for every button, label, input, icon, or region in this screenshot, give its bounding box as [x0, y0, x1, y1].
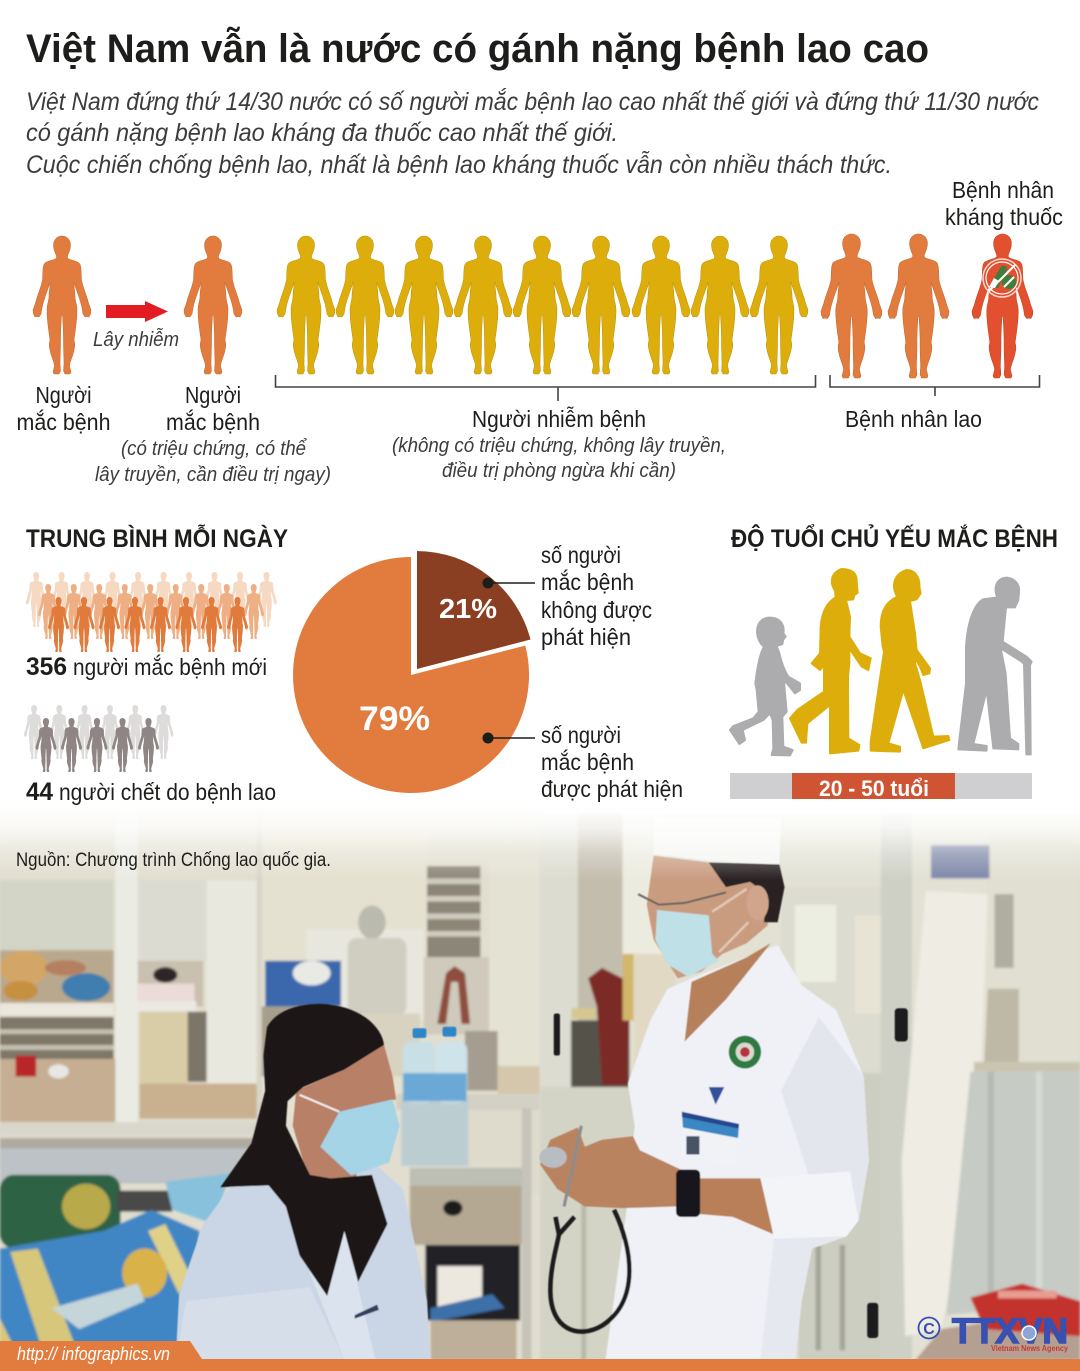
- intro text: có gánh nặng bệnh lao kháng đa thuốc cao nhất thế giới.: [26, 119, 618, 147]
- label: undetected: mắc bệnh: [541, 569, 634, 595]
- intro text: [26, 87, 1039, 179]
- figure: sick person: [33, 236, 91, 374]
- logo: TTXVN: TTXVN: [952, 1312, 1068, 1351]
- icon group: deaths: [24, 705, 174, 772]
- photo right part: doctor and room: [539, 810, 1080, 1360]
- note: infected: (không có triệu chứng, không lây truyền,: [392, 435, 726, 457]
- background photo: doctor and patient: [0, 808, 1080, 1360]
- leader: undetected: [482, 578, 535, 588]
- woman face and neck: [292, 1044, 396, 1180]
- arrow: infection: [106, 301, 168, 322]
- silhouette: elderly: [958, 578, 1032, 754]
- label: second sick person: Người: [185, 382, 241, 408]
- label: infection: Lây nhiễm: [93, 328, 179, 351]
- doctor forearm and hands: [692, 1178, 774, 1234]
- source: Nguồn: Chương trình Chống lao quốc gia.: [16, 850, 331, 871]
- stat: deaths: 44: [26, 778, 53, 806]
- label: first sick person: Người: [36, 382, 92, 408]
- label: drug-resistant patient: kháng thuốc: [945, 204, 1063, 230]
- photo fade to white: [0, 805, 1080, 880]
- label: detected: được phát hiện: [541, 776, 683, 802]
- stat: new cases: 356: [26, 653, 67, 681]
- slice: detected 79%: [293, 557, 529, 793]
- doctor cap: [654, 817, 781, 864]
- doctor emblem: [729, 1036, 761, 1069]
- figure: drug-resistant patient: [972, 234, 1033, 378]
- panel: daily average: [24, 523, 288, 806]
- age bar: 20 - 50 tuổi: [819, 776, 929, 801]
- label: undetected: số người: [541, 542, 621, 568]
- title: Việt Nam vẫn là nước có gánh nặng bệnh lao cao: [26, 25, 929, 71]
- stethoscope: [550, 1210, 629, 1332]
- label: drug-resistant patient: [945, 177, 1063, 230]
- stat: new cases: người mắc bệnh mới: [73, 654, 267, 680]
- value: 79%: 79%: [359, 700, 430, 738]
- doctor coat: [605, 945, 869, 1360]
- figures: TB patients: [821, 234, 949, 378]
- leader: detected: [482, 732, 535, 744]
- slice: undetected 21%: [417, 551, 530, 669]
- note: symptoms: [95, 438, 331, 486]
- footer strip: http:// infographics.vn: [17, 1344, 170, 1364]
- label: second sick person: [166, 382, 260, 435]
- logo: TTXVN: C: [923, 1321, 935, 1338]
- stat: deaths: người chết do bệnh lao: [59, 779, 276, 805]
- silhouette: adult: [790, 569, 871, 753]
- label: first sick person: mắc bệnh: [16, 409, 110, 435]
- bracket: TB patients: [830, 375, 1040, 396]
- doctor neck: [685, 943, 771, 1042]
- label: detected: mắc bệnh: [541, 749, 634, 775]
- intro text: Cuộc chiến chống bệnh lao, nhất là bệnh lao kháng thuốc vẫn còn nhiều thách thức.: [26, 150, 892, 179]
- label: undetected: không được: [541, 597, 652, 623]
- label: second sick person: mắc bệnh: [166, 409, 260, 435]
- label: undetected: phát hiện: [541, 624, 631, 650]
- silhouette: child: [730, 618, 800, 755]
- figure: second sick person: [184, 236, 242, 374]
- woman hair: [220, 1004, 387, 1296]
- photo left part: ward and patient: [0, 810, 540, 1360]
- transmission diagram: [16, 177, 1063, 486]
- label: detected: số người: [541, 722, 621, 748]
- label: first sick person: [16, 382, 110, 435]
- doctor head: [647, 856, 771, 978]
- woman gown: [176, 1164, 431, 1360]
- note: infected: điều trị phòng ngừa khi cần): [442, 460, 676, 482]
- panel: main age group: [730, 523, 1058, 801]
- logo: TTXVN: Vietnam News Agency: [991, 1343, 1068, 1353]
- label: infected: Người nhiễm bệnh: [472, 406, 646, 432]
- icon: no drugs: [983, 259, 1021, 297]
- doctor hair: [709, 863, 785, 922]
- label: detected: [541, 722, 683, 802]
- doctor ID badge: [681, 1112, 738, 1166]
- label: TB patients: Bệnh nhân lao: [845, 406, 982, 432]
- silhouettes: ages: [730, 569, 1032, 755]
- age bar: [730, 773, 1032, 801]
- silhouette: middle-aged: [871, 570, 949, 752]
- bracket: infected: [276, 375, 816, 401]
- note: infected: [392, 435, 726, 482]
- label: drug-resistant patient: Bệnh nhân: [952, 177, 1054, 203]
- pie chart: [293, 542, 683, 802]
- value: 21%: 21%: [439, 593, 497, 624]
- footer strip: [0, 1341, 1080, 1371]
- note: symptoms: (có triệu chứng, có thể: [121, 438, 307, 460]
- figures: infected people: [277, 236, 808, 374]
- heading: daily average: TRUNG BÌNH MỖI NGÀY: [26, 523, 288, 553]
- doctor mask: [655, 910, 719, 977]
- label: undetected: [541, 542, 652, 650]
- note: symptoms: lây truyền, cần điều trị ngay): [95, 464, 331, 486]
- icon group: new cases: [26, 572, 277, 652]
- woman mask: [320, 1099, 400, 1176]
